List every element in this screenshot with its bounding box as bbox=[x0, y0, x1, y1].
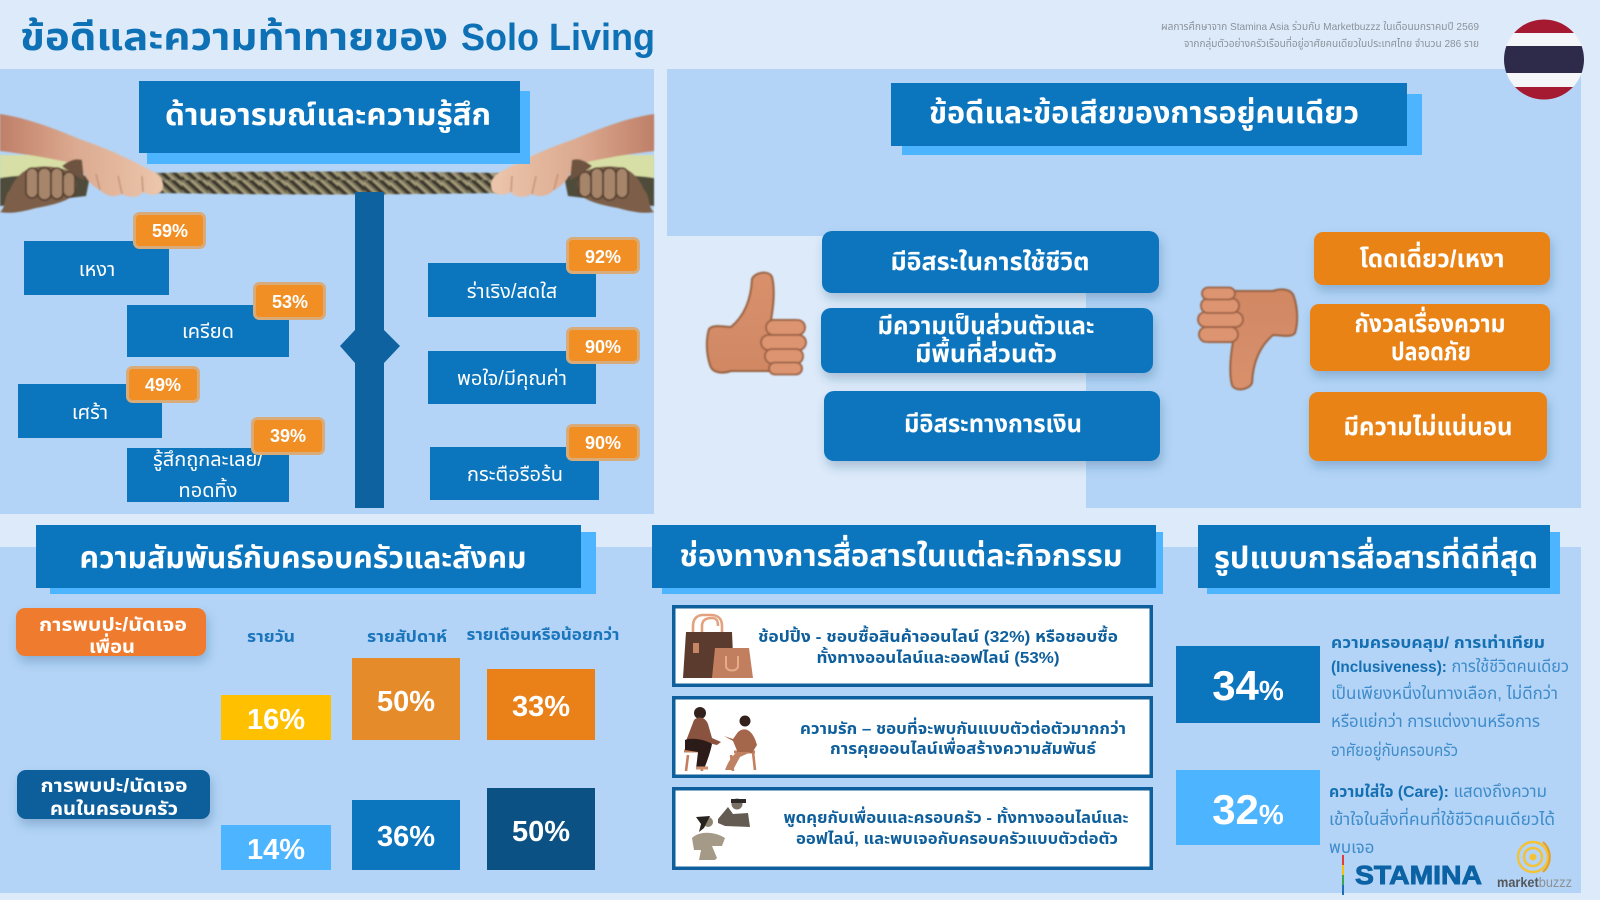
card: romance: การคุยออนไลน์เพื่อสร้างความสัมพันธ์ bbox=[830, 737, 1096, 758]
bar chart: friends: 33% bbox=[512, 691, 570, 723]
heading: pros and cons bbox=[891, 83, 1422, 155]
card: romance: ความรัก – ชอบที่จะพบกันแบบตัวต่อตัวมากกว่า bbox=[800, 717, 1126, 738]
pro: privacy: มีความเป็นส่วนตัวและ bbox=[878, 312, 1094, 340]
heading: best style bbox=[1198, 525, 1560, 594]
negative: neglected 39%: 39% bbox=[270, 426, 306, 446]
pro: privacy: มีพื้นที่ส่วนตัว bbox=[915, 336, 1057, 368]
icon: Thailand flag bbox=[1504, 20, 1584, 100]
pro: freedom in living bbox=[822, 231, 1159, 293]
heading: channels: ช่องทางการสื่อสารในแต่ละกิจกรรม bbox=[680, 534, 1122, 573]
bar chart: friends: 50% bbox=[377, 686, 435, 718]
heading: channels bbox=[652, 525, 1163, 594]
card: shopping: ทั้งทางออนไลน์และออฟไลน์ (53%) bbox=[816, 647, 1060, 667]
source note: ผลการศึกษาจาก Stamina Asia ร่วมกับ Marketbuzzz ในเดือนมกราคมปี 2569 bbox=[1161, 20, 1479, 33]
label: meeting family: คนในครอบครัว bbox=[50, 799, 178, 820]
title: ข้อดีและความท้าทายของ bbox=[20, 17, 448, 59]
icon: shopping bags bbox=[683, 615, 753, 678]
stat: 34 percent: 34% bbox=[1212, 662, 1284, 709]
positive: cheerful 92% bbox=[428, 238, 638, 317]
illustration: tug of war hands and rope bbox=[0, 114, 654, 213]
heading: relationships: ความสัมพันธ์กับครอบครัวและสังคม bbox=[80, 542, 526, 575]
negative: sad 49%: เศร้า bbox=[72, 401, 108, 424]
source note bbox=[1161, 20, 1479, 50]
pro: freedom in living: มีอิสระในการใช้ชีวิต bbox=[890, 248, 1090, 276]
icon: thumbs down bbox=[1198, 288, 1297, 389]
text: inclusiveness: ความครอบคลุม/ การเท่าเทียม bbox=[1331, 634, 1545, 652]
negative: sad 49%: 49% bbox=[145, 375, 181, 395]
positive: energetic 90%: 90% bbox=[585, 433, 621, 453]
text: inclusiveness: (Inclusiveness): การใช้ชีวิตคนเดียว bbox=[1331, 656, 1569, 676]
label: meeting friends bbox=[16, 608, 206, 658]
negative: neglected 39%: ทอดทิ้ง bbox=[179, 477, 237, 502]
heading: emotions: ด้านอารมณ์และความรู้สึก bbox=[165, 99, 491, 133]
bar chart: family: 14% bbox=[247, 834, 305, 866]
title: Solo Living bbox=[461, 17, 655, 59]
con: lonely bbox=[1314, 232, 1550, 285]
column labels: รายวัน bbox=[247, 629, 295, 646]
panel: communication channels bbox=[652, 525, 1163, 868]
label: meeting friends: การพบปะ/นัดเจอ bbox=[39, 615, 187, 636]
bar chart: family bbox=[221, 788, 595, 870]
positive: energetic 90%: กระตือรือร้น bbox=[467, 463, 563, 486]
panel: emotions and feelings bbox=[0, 69, 654, 514]
panel: bottom band bbox=[0, 547, 1581, 893]
column labels bbox=[247, 626, 620, 646]
text: care: เข้าใจในสิ่งที่คนที่ใช้ชีวิตคนเดียวได้ bbox=[1329, 807, 1555, 829]
bar chart: family: 50% bbox=[512, 816, 570, 848]
card: talking with friends and family bbox=[674, 789, 1151, 868]
positive: cheerful 92%: ร่าเริง/สดใส bbox=[467, 280, 557, 303]
card: shopping bbox=[674, 607, 1151, 685]
stat: 34 percent bbox=[1176, 646, 1320, 723]
con: safety worries: กังวลเรื่องความ bbox=[1354, 306, 1506, 338]
heading: best style: รูปแบบการสื่อสารที่ดีที่สุด bbox=[1214, 536, 1538, 576]
bar chart: friends: 16% bbox=[247, 704, 305, 736]
text: care: ความใส่ใจ (Care): แสดงถึงความ bbox=[1329, 782, 1547, 801]
column labels: รายเดือนหรือน้อยกว่า bbox=[466, 626, 620, 644]
label: meeting friends: เพื่อน bbox=[89, 633, 135, 658]
heading: emotions bbox=[139, 81, 530, 164]
negative: lonely 59% bbox=[24, 214, 204, 295]
panel: family and social relationships bbox=[16, 525, 620, 870]
column labels: รายสัปดาห์ bbox=[367, 629, 447, 646]
card: shopping: ช้อปปิ้ง - ชอบซื้อสินค้าออนไลน์ (32%) หรือชอบซื้อ bbox=[758, 625, 1118, 646]
title bbox=[20, 17, 655, 59]
con: uncertainty: มีความไม่แน่นอน bbox=[1344, 413, 1512, 441]
negative: neglected 39%: รู้สึกถูกละเลย/ bbox=[153, 448, 263, 472]
text: care bbox=[1329, 782, 1555, 857]
positive: energetic 90% bbox=[430, 426, 638, 500]
negative: stressed 53%: 53% bbox=[272, 292, 308, 312]
card: talking with friends and family: ออฟไลน์, และพบเจอกับครอบครัวแบบตัวต่อตัว bbox=[796, 830, 1118, 848]
negative: lonely 59%: เหงา bbox=[79, 259, 115, 281]
center divider with diamond bbox=[340, 192, 400, 508]
stat: 32 percent: 32% bbox=[1212, 786, 1284, 833]
label: meeting family: การพบปะ/นัดเจอ bbox=[40, 776, 188, 797]
con: safety worries bbox=[1310, 304, 1550, 371]
negative: stressed 53%: เครียด bbox=[182, 321, 234, 343]
heading: pros and cons: ข้อดีและข้อเสียของการอยู่คนเดียว bbox=[929, 97, 1359, 131]
positive: cheerful 92%: 92% bbox=[585, 247, 621, 267]
heading: relationships bbox=[36, 525, 596, 594]
con: uncertainty bbox=[1309, 392, 1547, 461]
card: romance bbox=[674, 698, 1151, 776]
positive: satisfied 90%: 90% bbox=[585, 337, 621, 357]
negative: stressed 53% bbox=[127, 284, 324, 357]
con: lonely: โดดเดี่ยว/เหงา bbox=[1360, 241, 1504, 273]
source note: จากกลุ่มตัวอย่างครัวเรือนที่อยู่อาศัยคนเดียวในประเทศไทย จำนวน 286 ราย bbox=[1184, 36, 1479, 50]
bar chart: family: 36% bbox=[377, 821, 435, 853]
stat: 32 percent bbox=[1176, 770, 1320, 845]
icon: people on phones bbox=[692, 798, 750, 860]
positive: satisfied 90%: พอใจ/มีคุณค่า bbox=[457, 367, 567, 390]
text: inclusiveness: อาศัยอยู่กับครอบครัว bbox=[1331, 741, 1458, 762]
text: inclusiveness bbox=[1331, 634, 1569, 762]
logo: marketbuzzz: marketbuzzz bbox=[1497, 874, 1572, 890]
card: talking with friends and family: พูดคุยกับเพื่อนและครอบครัว - ทั้งทางออนไลน์และ bbox=[784, 806, 1129, 828]
label: meeting family bbox=[17, 770, 210, 820]
logo: Stamina: STAMINA bbox=[1355, 860, 1482, 890]
con: safety worries: ปลอดภัย bbox=[1391, 339, 1471, 366]
negative: lonely 59%: 59% bbox=[152, 221, 188, 241]
negative: neglected 39% bbox=[127, 418, 324, 502]
icon: thumbs up bbox=[707, 273, 806, 374]
panel: best communication style bbox=[1176, 525, 1572, 895]
text: inclusiveness: เป็นเพียงหนึ่งในทางเลือก, ไม่ดีกว่า bbox=[1331, 681, 1558, 703]
panel: pros and cons bbox=[667, 69, 1581, 508]
text: inclusiveness: หรือแย่กว่า การแต่งงานหรือการ bbox=[1331, 712, 1540, 731]
logo: marketbuzzz bbox=[1497, 842, 1572, 890]
pro: financial freedom: มีอิสระทางการเงิน bbox=[904, 411, 1082, 438]
bar chart: friends bbox=[221, 658, 595, 740]
pro: privacy bbox=[821, 308, 1153, 373]
icon: two people talking bbox=[684, 707, 757, 771]
text: care: พบเจอ bbox=[1329, 838, 1374, 857]
negative: sad 49% bbox=[18, 368, 198, 438]
pro: financial freedom bbox=[824, 391, 1160, 461]
positive: satisfied 90% bbox=[428, 328, 638, 404]
